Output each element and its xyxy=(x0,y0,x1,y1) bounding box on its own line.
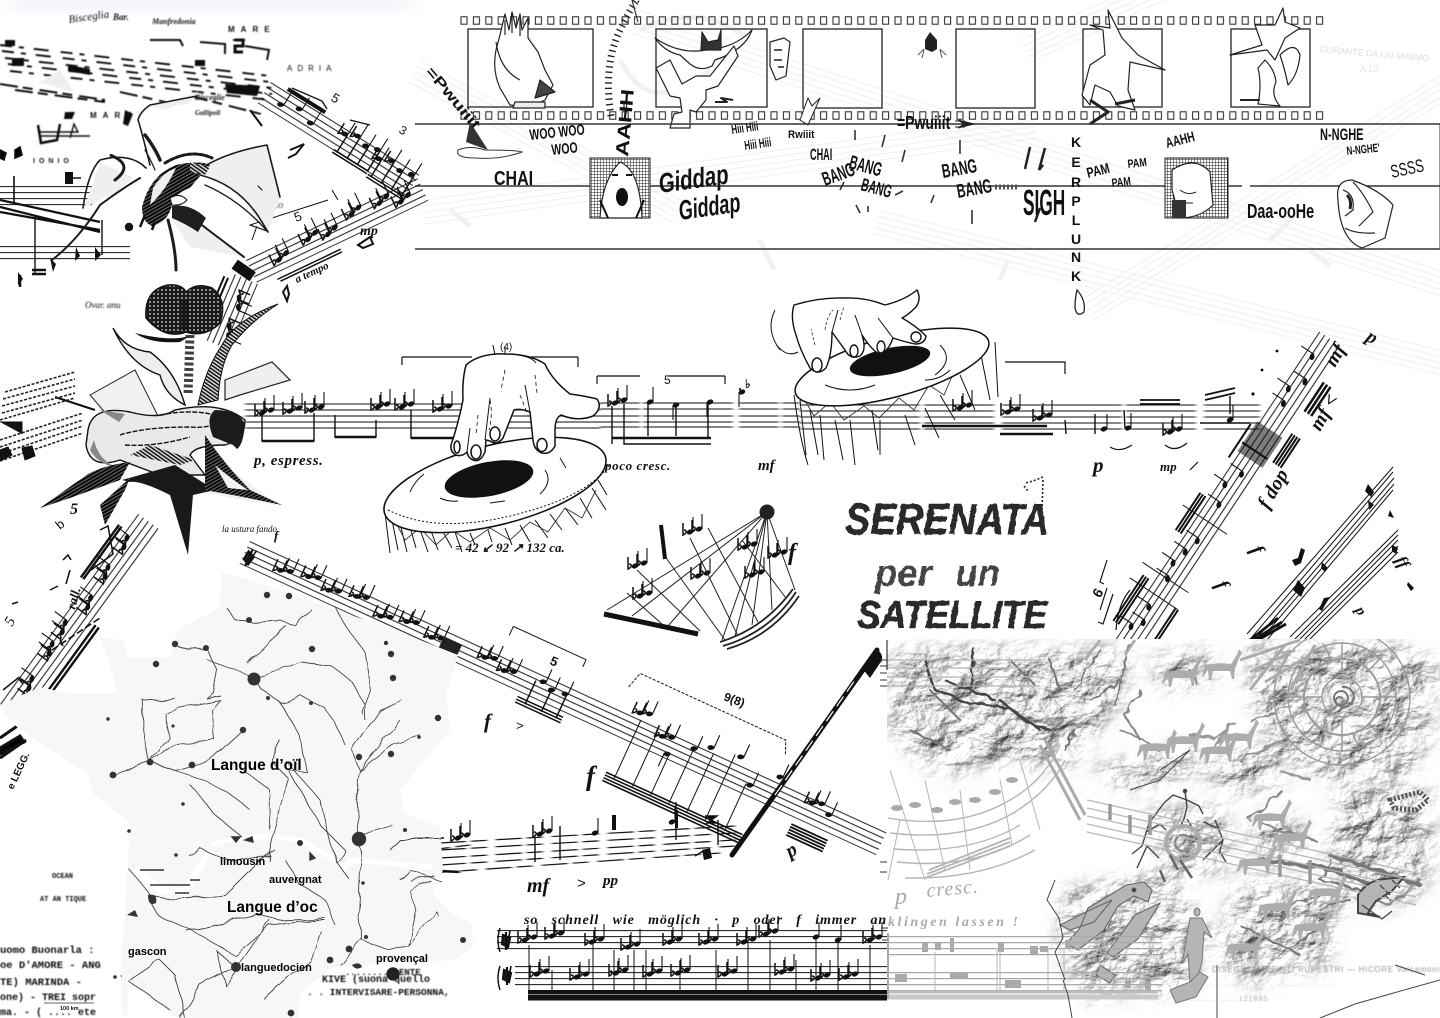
panel: right diagonal staves: p xyxy=(1361,325,1381,349)
sound words: AAHH xyxy=(612,88,638,157)
sound words: Hiii Hiii xyxy=(730,119,759,138)
panel: right diagonal staves: ff xyxy=(1392,552,1415,574)
sound words: BANG xyxy=(847,153,884,181)
dynamics: mp xyxy=(1160,459,1177,474)
sound words: CHAI xyxy=(810,145,832,164)
panel: map of France xyxy=(0,572,473,1018)
cracks xyxy=(1047,750,1440,1018)
light wedge xyxy=(40,70,198,108)
drum xyxy=(375,419,615,553)
map lettering: Bisceglie xyxy=(194,93,225,102)
ocean labels: OCEAN xyxy=(52,873,73,881)
panel: bottom score xyxy=(497,913,998,998)
sound words xyxy=(422,64,1426,314)
drum xyxy=(788,312,998,465)
rock surface xyxy=(887,639,1311,927)
KERPLUNK: U xyxy=(1071,231,1081,247)
rivers xyxy=(113,606,442,1018)
ocean labels: AT AN TIQUE xyxy=(40,896,86,904)
sound words: CHAI xyxy=(494,167,533,189)
panel: long diagonal staff: f xyxy=(484,709,493,733)
panel: central horizontal staff with notes: 5 xyxy=(664,373,671,387)
map land xyxy=(0,572,473,1018)
icon: bending figure right xyxy=(1230,8,1300,106)
KERPLUNK: P xyxy=(1071,193,1081,209)
panel: horizontal smeared staff: pp xyxy=(601,873,618,889)
ghost dynamics: klingen lassen ! xyxy=(888,915,1018,930)
icon: small figure between frames xyxy=(918,32,946,58)
KERPLUNK: K xyxy=(1071,268,1081,284)
staff: descending xyxy=(255,69,427,200)
dynamics: mf xyxy=(758,458,777,474)
map lettering: MARE xyxy=(90,111,138,120)
panel: central horizontal staff with notes xyxy=(245,342,1260,477)
staff: rising xyxy=(240,166,432,291)
handwritten text lower left: one) - TREI sopr xyxy=(0,992,96,1004)
panel: long diagonal staff xyxy=(220,503,904,897)
panel: left score fragment beside spider xyxy=(0,147,130,287)
panel: score lower-left diagonal xyxy=(0,372,166,791)
ghost dynamics: p xyxy=(893,884,907,910)
cities xyxy=(106,592,466,1016)
map lettering: Bar. xyxy=(112,12,129,22)
panel: right diagonal staves: mf xyxy=(1320,338,1352,370)
dynamics: p, espress. xyxy=(252,453,324,469)
faint background score behind comic strip: A 13' xyxy=(1360,64,1380,74)
language labels: gascon xyxy=(128,946,167,958)
map lettering: IONIO xyxy=(33,158,73,165)
rock strokes xyxy=(910,645,1420,955)
panel: long diagonal staff: f xyxy=(274,528,280,543)
arrow xyxy=(800,98,820,125)
sprocket holes top xyxy=(460,16,1325,25)
faint background score behind comic strip xyxy=(408,0,1440,379)
ghost bottom score xyxy=(887,933,1162,999)
sound words: BANG xyxy=(820,160,858,191)
title: Serenata per un satellite: per un xyxy=(874,553,1000,595)
sound words: WOO xyxy=(551,138,578,158)
panel: spider upper xyxy=(52,96,280,270)
handwritten text lower left: TE) MARINDA - xyxy=(0,977,82,989)
panel: long diagonal staff: la ustura fando xyxy=(222,524,278,534)
panel: right diagonal staves: p xyxy=(1351,602,1369,619)
map lettering: MARE xyxy=(228,25,276,34)
panel: horizontal smeared staff xyxy=(340,802,735,897)
sound words: N-NGHE xyxy=(1320,126,1364,145)
sound words: SSSS xyxy=(1389,156,1426,183)
ghost dynamics xyxy=(888,884,1018,929)
panel: rock art collage xyxy=(887,629,1440,1018)
panel: right diagonal staves: f xyxy=(1246,542,1269,560)
dark note clusters xyxy=(5,40,260,126)
sound words: Giddap xyxy=(657,160,731,200)
dark leaf xyxy=(1390,792,1428,810)
sound words: =Pwuiiit xyxy=(897,113,951,133)
language labels: auvergnat xyxy=(269,874,322,886)
language labels: provençal xyxy=(376,953,428,965)
panel: thick diagonal beam xyxy=(732,650,887,855)
wings xyxy=(195,145,280,232)
panel: right diagonal staves: 6 xyxy=(1089,585,1107,600)
panel: right diagonal staves: f xyxy=(1211,576,1234,595)
KERPLUNK: E xyxy=(1071,154,1081,170)
horned figures lower left xyxy=(1060,882,1160,983)
white torn strip xyxy=(212,837,432,868)
KERPLUNK: K xyxy=(1071,134,1081,150)
sound words: BANG xyxy=(955,175,994,203)
panel: score lower-left diagonal: rall. xyxy=(63,586,84,611)
panel: horizontal smeared staff: > xyxy=(577,875,586,892)
spiral wheel xyxy=(1250,629,1410,765)
language labels: limousin xyxy=(220,856,266,868)
handwritten text lower left xyxy=(0,945,101,1018)
sound words: Daa-ooHe xyxy=(1247,199,1314,223)
panel: fan staff xyxy=(604,504,799,649)
sound words: Giddap xyxy=(677,187,742,226)
animal creature right xyxy=(1358,877,1404,919)
KERPLUNK xyxy=(1071,134,1081,284)
body xyxy=(142,162,210,226)
dynamics: p xyxy=(1091,453,1104,477)
icon: face screaming in frame xyxy=(590,158,650,218)
panel: score lower-left diagonal: 5 xyxy=(2,614,19,629)
dynamics xyxy=(252,453,1177,477)
sound dashes column xyxy=(608,0,640,116)
panel: diagonal staves upper left: a tempo xyxy=(293,260,331,286)
handwritten text lower left: oe D'AMORE - ANG xyxy=(0,960,101,972)
handwritten text lower left: uomo Buonarla : xyxy=(0,945,95,957)
language labels: Langue d’oïl xyxy=(211,757,302,774)
panel: diagonal staves upper left: 3 xyxy=(396,123,410,138)
panel: drum and hand left xyxy=(375,345,615,553)
panel: score lower-left diagonal: b xyxy=(52,516,67,532)
panel: fan staff: f xyxy=(788,540,798,566)
KERPLUNK: L xyxy=(1072,212,1081,228)
ocean labels xyxy=(40,873,86,904)
legs xyxy=(52,96,280,270)
handwritten text lower centre xyxy=(307,968,450,998)
map lettering: Manfredonia xyxy=(151,17,196,26)
title: Serenata per un satellite: SERENATA xyxy=(845,495,1049,544)
scale bar: 100 km xyxy=(60,1006,79,1012)
dashed score smear xyxy=(0,40,272,115)
panel: top left map and score fragment xyxy=(0,8,336,310)
panel: diagonal staves upper left: 5 xyxy=(328,90,342,106)
sound words: PAM xyxy=(1127,156,1148,171)
map lettering: Taranto xyxy=(252,200,283,211)
title: Serenata per un satellite xyxy=(845,495,1049,637)
sound words: BANG xyxy=(940,155,979,183)
hand xyxy=(451,345,599,461)
ghost staves xyxy=(887,640,1416,905)
panel: drum and hand right xyxy=(771,290,998,465)
film frames xyxy=(468,29,1310,108)
dancing figures xyxy=(1132,789,1226,882)
sound words: Rwiiit xyxy=(788,130,815,141)
ghost fan staff xyxy=(888,740,1085,880)
upper leaves xyxy=(113,328,185,405)
panel: long diagonal staff: > xyxy=(516,718,524,733)
panel: diagonal staves upper left: mp xyxy=(360,224,378,239)
icon: running figure right xyxy=(1082,10,1165,124)
KERPLUNK: N xyxy=(1071,249,1081,265)
sparks xyxy=(840,130,972,224)
panel: long diagonal staff: f xyxy=(586,761,598,791)
faint background score behind comic strip: DURANTE DA UN MINIMO xyxy=(1320,44,1430,64)
human figure bottom xyxy=(1170,908,1212,1003)
panel: central horizontal staff with notes: ♭ xyxy=(745,377,751,391)
icon: chief with headdress xyxy=(495,12,555,108)
dark underside xyxy=(122,465,215,555)
sound words: SIGH xyxy=(1023,182,1065,223)
sound words: WOO WOO xyxy=(529,120,585,143)
map lettering: ADRIA xyxy=(287,64,336,73)
panel: score lower-left diagonal: e LEGG. xyxy=(6,751,32,791)
panel: right diagonal staves xyxy=(1089,319,1415,664)
faded caption: ………… …… ……… … … …… … … …… xyxy=(1200,981,1335,988)
map lettering: Ovar. anu xyxy=(85,300,121,310)
sound words: AAHH xyxy=(1164,129,1196,151)
panel: central horizontal staff with notes: , xyxy=(738,378,742,393)
panel: horizontal smeared staff: mf xyxy=(527,875,552,897)
sprocket holes bottom xyxy=(460,111,1325,120)
sound words: PAM xyxy=(1085,159,1111,181)
icon: ovary cross-section xyxy=(135,285,223,342)
faded caption: ………… …… 121695 xyxy=(1185,996,1268,1003)
dynamics: poco cresc. xyxy=(604,458,671,473)
panel: long diagonal staff: p xyxy=(780,838,801,863)
hand xyxy=(792,290,926,372)
map lettering: Gallipoli xyxy=(195,109,220,117)
map lettering: Bisceglia xyxy=(68,8,110,26)
panel: long diagonal staff: 5 xyxy=(548,653,560,670)
panel: score lower-left diagonal: 5 xyxy=(70,501,78,518)
staff under spider to ovary xyxy=(199,271,265,353)
title: Serenata per un satellite: SATELLITE xyxy=(857,594,1048,637)
faded caption xyxy=(1185,965,1440,1003)
ghost dynamics: cresc. xyxy=(926,875,980,902)
panel: spider lower xyxy=(40,304,290,555)
body xyxy=(86,407,245,475)
animal frieze xyxy=(1137,649,1347,960)
language labels: Langue d’oc xyxy=(227,899,318,916)
handwritten text lower centre: KIVE (suona quello xyxy=(322,974,430,986)
KERPLUNK: R xyxy=(1071,174,1081,190)
panel: right diagonal staves: f dop xyxy=(1253,465,1293,512)
icon: fallen head xyxy=(1338,180,1393,248)
top smudge xyxy=(10,0,410,8)
map lettering xyxy=(33,8,336,310)
icon: face in frame xyxy=(1165,158,1228,218)
sound words: PAM xyxy=(1111,175,1132,190)
icon: cowboy with pistols xyxy=(655,30,790,128)
sound words: Hiii Hiii xyxy=(743,135,772,154)
tempo marking: = 42 ↙ 92 ↗ 132 ca. xyxy=(455,540,565,555)
handwritten text lower centre: . . INTERVISARE-PERSONNA, xyxy=(307,987,450,998)
panel: comic score lines xyxy=(415,64,1440,314)
panel: diagonal staves upper left xyxy=(232,69,432,301)
sound words: N-NGHE' xyxy=(1346,142,1381,159)
sound words: BANG xyxy=(859,176,894,203)
handwritten text lower centre: ......... ENTE xyxy=(345,968,421,978)
panel: right diagonal staves: mf < xyxy=(1305,390,1344,434)
panel: film strip xyxy=(460,0,1325,128)
panel: long diagonal staff: 9(8) xyxy=(722,690,747,710)
language labels xyxy=(128,757,428,974)
panel: diagonal staves upper left: 5 xyxy=(292,208,304,225)
language labels: languedocien xyxy=(241,962,312,974)
panel: central horizontal staff with notes: (4) xyxy=(500,342,512,353)
scale bar xyxy=(44,1003,94,1012)
panel: bottom score: so schnell wie möglich · p oder f immer anklingen lassen! xyxy=(523,913,998,928)
sound words: =Pwuiiit xyxy=(422,64,484,133)
